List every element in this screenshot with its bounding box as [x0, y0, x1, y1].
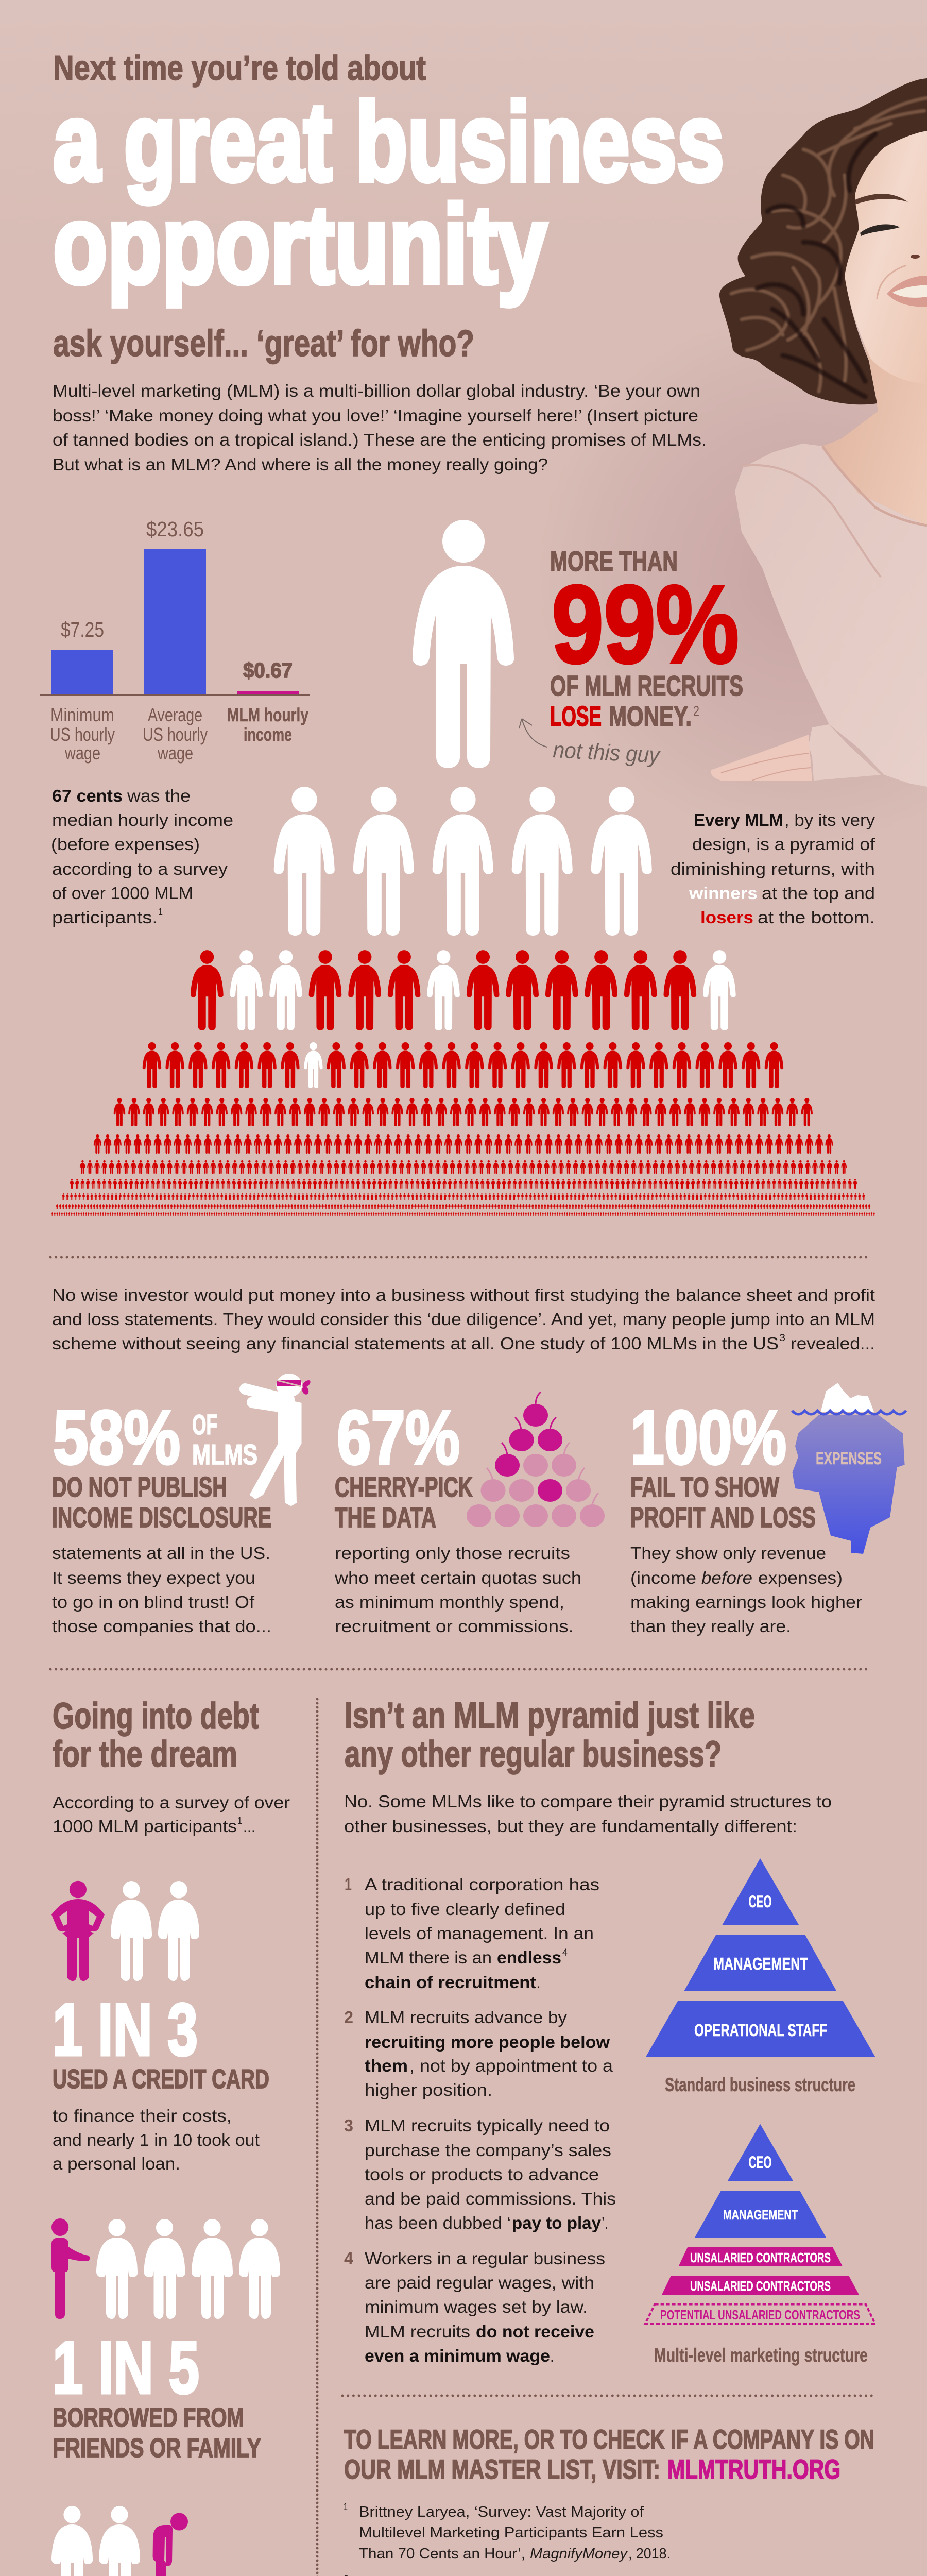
tier: unsalaried contractors: UNSALARIED CONTRACTORS	[690, 2250, 831, 2265]
bar labels: Minimum	[50, 704, 114, 725]
tier: unsalaried contractors: UNSALARIED CONTRACTORS	[690, 2278, 831, 2294]
text: every MLM pyramid of diminishing returns: winners	[689, 884, 758, 903]
stat: 58% of MLMs: DO NOT PUBLISH	[52, 1471, 227, 1503]
text: no, they are different: No. Some MLMs like to compare their pyramid structures to	[344, 1792, 832, 1811]
icon: two white people and bowing person	[52, 2506, 188, 2576]
list item 4: minimum wages set by law.	[365, 2297, 588, 2316]
stat: 1 in 3 used a credit card: to finance their costs,	[53, 2106, 232, 2125]
tier: management	[695, 2191, 826, 2238]
callout: more than 99% lose money: 99%	[552, 562, 739, 686]
text: according to a survey: 1	[237, 1816, 242, 1826]
intro paragraph: boss!’ ‘Make money doing what you love!’ ‘Imagine yourself here!’ (Insert picture	[53, 406, 698, 425]
list item 4	[344, 2249, 605, 2365]
list item 1: A traditional corporation has	[365, 1875, 599, 1894]
list item 4: .	[550, 2346, 554, 2365]
callout: more than 99% lose money: MORE THAN	[550, 545, 678, 577]
text: every MLM pyramid of diminishing returns: at the bottom.	[758, 908, 875, 927]
list item 1: chain of recruitment	[365, 1973, 536, 1992]
tier: management: MANAGEMENT	[723, 2207, 798, 2223]
text: every MLM pyramid of diminishing returns	[671, 810, 876, 927]
intro paragraph: Multi-level marketing (MLM) is a multi-billion dollar global industry. ‘Be your own	[53, 381, 700, 400]
text: according to a survey: According to a survey of over	[53, 1793, 290, 1812]
bar values: $23.65	[146, 517, 204, 541]
stat: 58% of MLMs: OF	[192, 1409, 217, 1440]
callout: more than 99% lose money: LOSE	[550, 700, 602, 732]
paragraph: due diligence	[52, 1285, 875, 1353]
stat: 100% fail to show profit and loss: (income	[630, 1568, 696, 1587]
list item 1: 1	[345, 1875, 352, 1894]
list item 2: MLM recruits advance by	[365, 2008, 568, 2027]
right heading: isn't an MLM pyramid just like: Isn’t an MLM pyramid just like	[345, 1696, 755, 1736]
bar labels	[50, 704, 308, 764]
list item 4: 4	[344, 2249, 354, 2268]
list item 4: MLM recruits	[365, 2322, 470, 2341]
list item 4: do not receive	[476, 2322, 594, 2341]
list item 4: are paid regular wages, with	[365, 2273, 594, 2292]
tier: unsalaried contractors	[662, 2276, 859, 2295]
icon: person with empty pockets and two white people	[52, 1881, 199, 1981]
text: no, they are different	[344, 1792, 832, 1836]
bar labels: US hourly	[50, 724, 115, 745]
stat: 67% cherry-pick the data: 67%	[337, 1395, 460, 1480]
list item 3: and be paid commissions. This	[365, 2189, 616, 2208]
pyramid level: fourteen people	[191, 950, 736, 1030]
stat: 1 in 3 used a credit card	[53, 1988, 269, 2173]
text: every MLM pyramid of diminishing returns: , by its very	[784, 810, 876, 829]
footnote 1: Than 70 Cents an Hour’,	[359, 2546, 525, 2562]
tier: operational staff: OPERATIONAL STAFF	[694, 2021, 827, 2040]
pyramid level: twenty-eight people	[141, 1042, 785, 1088]
stat: 100% fail to show profit and loss: FAIL TO SHOW	[630, 1471, 779, 1503]
footnote 1: Multilevel Marketing Participants Earn Less	[359, 2524, 663, 2541]
text: according to a survey: ...	[243, 1817, 255, 1836]
callout: more than 99% lose money	[550, 545, 743, 732]
stat: 1 in 5 borrowed	[53, 2326, 261, 2463]
stat: 58% of MLMs: those companies that do...	[52, 1617, 271, 1636]
text: no, they are different: other businesses, but they are fundamentally different:	[344, 1817, 797, 1836]
list item 3: MLM recruits typically need to	[365, 2116, 610, 2135]
footnote 1: Brittney Laryea, ‘Survey: Vast Majority of	[359, 2504, 644, 2520]
footnote 1: MagnifyMoney	[530, 2546, 628, 2562]
left heading: going into debt	[53, 1696, 259, 1775]
intro paragraph: of tanned bodies on a tropical island.) These are the enticing promises of MLMs.	[53, 430, 707, 449]
bar labels: US hourly	[143, 724, 208, 745]
stat: 100% fail to show profit and loss: PROFIT AND LOSS	[630, 1501, 816, 1533]
icon: cherry pyramid	[467, 1392, 605, 1527]
text: 67 cents: (before expenses)	[51, 835, 200, 854]
list item 1	[345, 1875, 599, 1992]
list item 4: Workers in a regular business	[365, 2249, 605, 2268]
text: 67 cents: 67 cents	[52, 786, 123, 805]
text: 67 cents: according to a survey	[52, 859, 228, 878]
text: every MLM pyramid of diminishing returns: losers	[700, 908, 753, 927]
list item 3: purchase the company’s sales	[365, 2141, 611, 2160]
paragraph: due diligence: scheme without seeing any financial statements at all. One study of 100 MLMs in the US	[52, 1334, 779, 1353]
subtitle: ask yourself: ask yourself... ‘great’ for who?	[53, 323, 474, 364]
bar: average wage	[144, 549, 206, 695]
text: 67 cents: median hourly income	[52, 810, 233, 829]
bar values	[61, 517, 293, 682]
text: every MLM pyramid of diminishing returns: design, is a pyramid of	[692, 835, 876, 854]
stat: 67% cherry-pick the data: CHERRY-PICK	[335, 1471, 473, 1503]
tier: management	[684, 1935, 836, 1991]
list item 1: endless	[497, 1948, 561, 1967]
icon: large white person (top of pyramid)	[413, 520, 514, 768]
stat: 1 in 5 borrowed: FRIENDS OR FAMILY	[53, 2433, 261, 2463]
list item 2: them	[365, 2056, 408, 2075]
call to action: visit mlmtruth.org: OUR MLM MASTER LIST, VISIT:	[344, 2454, 660, 2485]
stat: 58% of MLMs: MLMS	[192, 1438, 258, 1470]
stat: 58% of MLMs: It seems they expect you	[52, 1568, 255, 1587]
stat: 1 in 3 used a credit card: 1 IN 3	[53, 1988, 198, 2071]
tier: CEO	[728, 2124, 793, 2181]
call to action: visit mlmtruth.org: MLMTRUTH.ORG	[667, 2454, 840, 2485]
stat: 67% cherry-pick the data: as minimum monthly spend,	[335, 1592, 564, 1612]
list item 1: .	[536, 1973, 541, 1992]
tier: potential unsalaried contractors	[645, 2304, 875, 2324]
tier: potential unsalaried contractors: POTENTIAL UNSALARIED CONTRACTORS	[660, 2307, 860, 2323]
bar labels: wage	[64, 742, 100, 764]
stat: 58% of MLMs	[52, 1395, 271, 1636]
footnote 2	[344, 2574, 698, 2576]
list item 3: pay to play	[512, 2213, 602, 2232]
title: a great business opportunity: opportunity	[53, 182, 547, 307]
tier: operational staff	[646, 2001, 876, 2057]
stat: 58% of MLMs: 58%	[53, 1395, 180, 1480]
list item 3: has been dubbed ‘	[365, 2213, 511, 2232]
list item 3: ’.	[602, 2213, 608, 2232]
handwritten note: not this guy	[519, 719, 662, 768]
pyramid levels: many tiny losing recruits	[51, 1098, 876, 1216]
paragraph: due diligence: No wise investor would put money into a business without first studying the balance sheet and profit	[52, 1285, 875, 1304]
handwritten note: not this guy: not this guy	[552, 737, 662, 768]
text: 67 cents: was the	[127, 786, 191, 805]
tier: unsalaried contractors	[679, 2247, 843, 2266]
stat: 100% fail to show profit and loss: 100%	[630, 1395, 786, 1480]
paragraph: due diligence: revealed...	[791, 1334, 875, 1353]
list item 2: recruiting more people below	[365, 2032, 610, 2052]
list item 2: 2	[344, 2008, 353, 2027]
stat: 1 in 3 used a credit card: a personal loan.	[53, 2154, 180, 2173]
text: according to a survey: 1000 MLM participants	[53, 1817, 237, 1836]
paragraph: due diligence: and loss statements. They would consider this ‘due diligence’. And yet, many people jump into an MLM	[52, 1310, 875, 1329]
bar values: $7.25	[61, 618, 104, 641]
list item 1: levels of management. In an	[365, 1924, 594, 1943]
stat: 1 in 3 used a credit card: and nearly 1 in 10 took out	[53, 2130, 260, 2149]
left heading: going into debt: for the dream	[53, 1734, 237, 1775]
pyramid level: five white people	[274, 787, 652, 936]
list item 1: MLM there is an	[365, 1948, 492, 1967]
stat: 1 in 5 borrowed: 1 IN 5	[53, 2326, 199, 2409]
list item 3	[344, 2116, 616, 2232]
list item 3: 3	[344, 2116, 353, 2135]
stat: 58% of MLMs: statements at all in the US.	[52, 1544, 270, 1563]
stat: 58% of MLMs: to go in on blind trust! Of	[52, 1592, 255, 1612]
stat: 1 in 3 used a credit card: USED A CREDIT CARD	[53, 2064, 269, 2094]
text: according to a survey	[53, 1793, 290, 1836]
left heading: going into debt: Going into debt	[53, 1696, 259, 1737]
paragraph: due diligence: 3	[779, 1333, 785, 1344]
icon: person reaching out with four white people	[52, 2218, 280, 2319]
stat: 67% cherry-pick the data	[334, 1395, 581, 1636]
callout: more than 99% lose money: OF MLM RECRUITS	[550, 670, 743, 702]
stat: 100% fail to show profit and loss: than they really are.	[630, 1617, 791, 1636]
list item 4: even a minimum wage	[365, 2346, 550, 2365]
tier: management: MANAGEMENT	[713, 1954, 808, 1973]
bar labels: income	[244, 724, 292, 745]
intro paragraph: But what is an MLM? And where is all the money really going?	[53, 455, 548, 474]
icon: iceberg of expenses: EXPENSES	[816, 1449, 882, 1468]
text: every MLM pyramid of diminishing returns: at the top and	[762, 884, 875, 903]
stat: 100% fail to show profit and loss: before	[701, 1568, 752, 1587]
list item 3: tools or products to advance	[365, 2165, 599, 2184]
title: a great business opportunity	[53, 79, 724, 307]
callout: more than 99% lose money: 2	[693, 703, 699, 719]
right heading: isn't an MLM pyramid just like	[345, 1696, 755, 1775]
bar labels: Average	[148, 704, 202, 725]
intro paragraph	[53, 381, 707, 474]
footnote 1: , 2018.	[628, 2546, 671, 2562]
stat: 58% of MLMs: INCOME DISCLOSURE	[52, 1501, 271, 1533]
tier: CEO: CEO	[749, 2153, 771, 2172]
caption: multi-level marketing structure: Multi-level marketing structure	[654, 2345, 868, 2366]
icon: blindfolded man	[245, 1374, 312, 1506]
right heading: isn't an MLM pyramid just like: any other regular business?	[345, 1734, 722, 1775]
bar: MLM income	[237, 691, 299, 695]
tier: CEO	[722, 1858, 799, 1925]
stat: 67% cherry-pick the data: recruitment or commissions.	[335, 1617, 574, 1636]
bar: minimum wage	[52, 650, 113, 695]
title: next time you're told about: Next time you’re told about	[53, 48, 426, 88]
bar labels: wage	[157, 742, 193, 764]
text: 67 cents	[51, 786, 233, 927]
text: 67 cents: participants.	[52, 908, 158, 927]
tier: CEO: CEO	[749, 1892, 771, 1911]
footnote 1: 1	[344, 2502, 348, 2513]
icon: iceberg of expenses	[792, 1383, 906, 1554]
list item 2	[344, 2008, 613, 2099]
text: every MLM pyramid of diminishing returns: Every MLM	[694, 810, 783, 829]
stat: 67% cherry-pick the data: reporting only those recruits	[335, 1544, 570, 1563]
text: 67 cents: of over 1000 MLM	[52, 884, 193, 903]
chart: MLM pyramid	[645, 2124, 875, 2324]
text: 67 cents: 1	[158, 907, 163, 918]
bar labels: MLM hourly	[227, 704, 308, 725]
list item 1: up to five clearly defined	[365, 1900, 565, 1919]
footnote 1	[344, 2502, 671, 2562]
stat: 100% fail to show profit and loss: They show only revenue	[630, 1544, 826, 1563]
stat: 1 in 5 borrowed: BORROWED FROM	[53, 2403, 244, 2433]
stat: 100% fail to show profit and loss	[630, 1395, 862, 1636]
stat: 67% cherry-pick the data: THE DATA	[335, 1501, 436, 1533]
call to action: visit mlmtruth.org	[344, 2425, 874, 2485]
callout: more than 99% lose money: MONEY.	[609, 700, 692, 732]
list item 1: 4	[562, 1947, 568, 1958]
stat: 67% cherry-pick the data: who meet certain quotas such	[334, 1568, 581, 1587]
list item 2: , not by appointment to a	[409, 2056, 613, 2075]
caption: standard business structure: Standard business structure	[665, 2074, 855, 2095]
stat: 100% fail to show profit and loss: making earnings look higher	[630, 1592, 862, 1612]
bar chart: hourly wages	[40, 517, 310, 764]
bar values: $0.67	[243, 658, 293, 682]
chart: standard business pyramid	[646, 1858, 876, 2057]
list item 2: higher position.	[365, 2080, 492, 2099]
text: every MLM pyramid of diminishing returns: diminishing returns, with	[671, 859, 875, 878]
stat: 100% fail to show profit and loss: expenses)	[758, 1568, 843, 1587]
title: a great business opportunity: a great business	[53, 79, 724, 204]
photo: smiling woman leaning on table	[711, 78, 927, 787]
